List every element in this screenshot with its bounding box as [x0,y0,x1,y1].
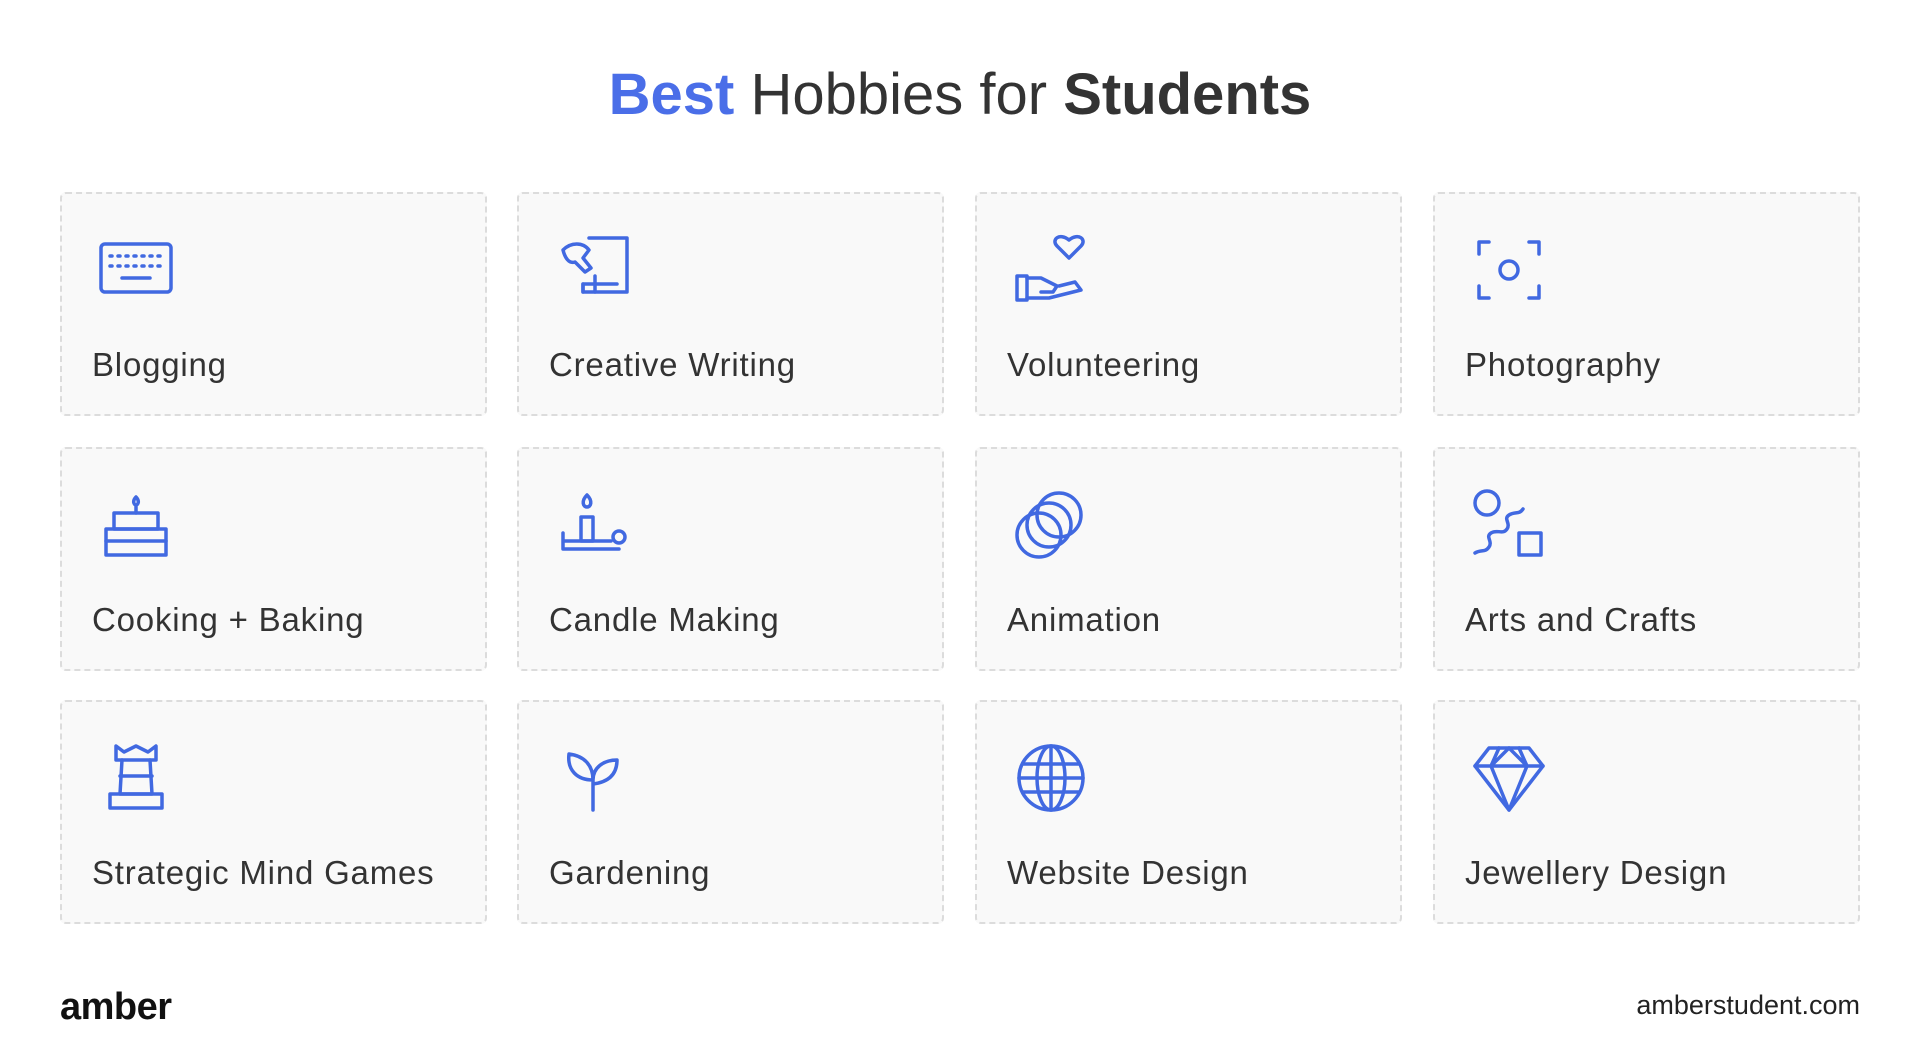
icon: sprout [567,752,619,812]
label: Jewellery Design [1465,854,1727,891]
label: Photography [1465,346,1661,383]
card: Blogging [60,192,487,416]
card: Volunteering [975,192,1402,416]
icon: hand with heart [1015,234,1085,302]
icon: globe [1017,744,1085,812]
icon: diamond [1473,746,1545,812]
label: Cooking + Baking [92,601,364,638]
card: Website Design [975,700,1402,924]
icon: chess rook [108,744,164,810]
card: Jewellery Design [1433,700,1860,924]
icon: circles [1015,491,1083,559]
label: Blogging [92,346,227,383]
title: Best Hobbies for Students [609,62,1311,127]
card: Photography [1433,192,1860,416]
label: Gardening [549,854,710,891]
label: Animation [1007,601,1161,638]
card: Creative Writing [517,192,944,416]
label: Candle Making [549,601,780,638]
label: Website Design [1007,854,1249,891]
card: Cooking + Baking [60,447,487,671]
card: Candle Making [517,447,944,671]
card: Arts and Crafts [1433,447,1860,671]
card: Strategic Mind Games [60,700,487,924]
icon: keyboard [99,242,173,294]
icon: camera focus [1477,240,1541,300]
logo: amber [60,986,172,1028]
label: Strategic Mind Games [92,854,434,891]
icon: quill and paper [561,236,629,294]
card: Gardening [517,700,944,924]
label: Creative Writing [549,346,796,383]
website url: amberstudent.com [1636,990,1860,1020]
label: Volunteering [1007,346,1200,383]
card: Animation [975,447,1402,671]
icon: shapes [1473,489,1543,557]
label: Arts and Crafts [1465,601,1697,638]
icon: cake [104,495,168,557]
icon: candle [561,493,627,551]
